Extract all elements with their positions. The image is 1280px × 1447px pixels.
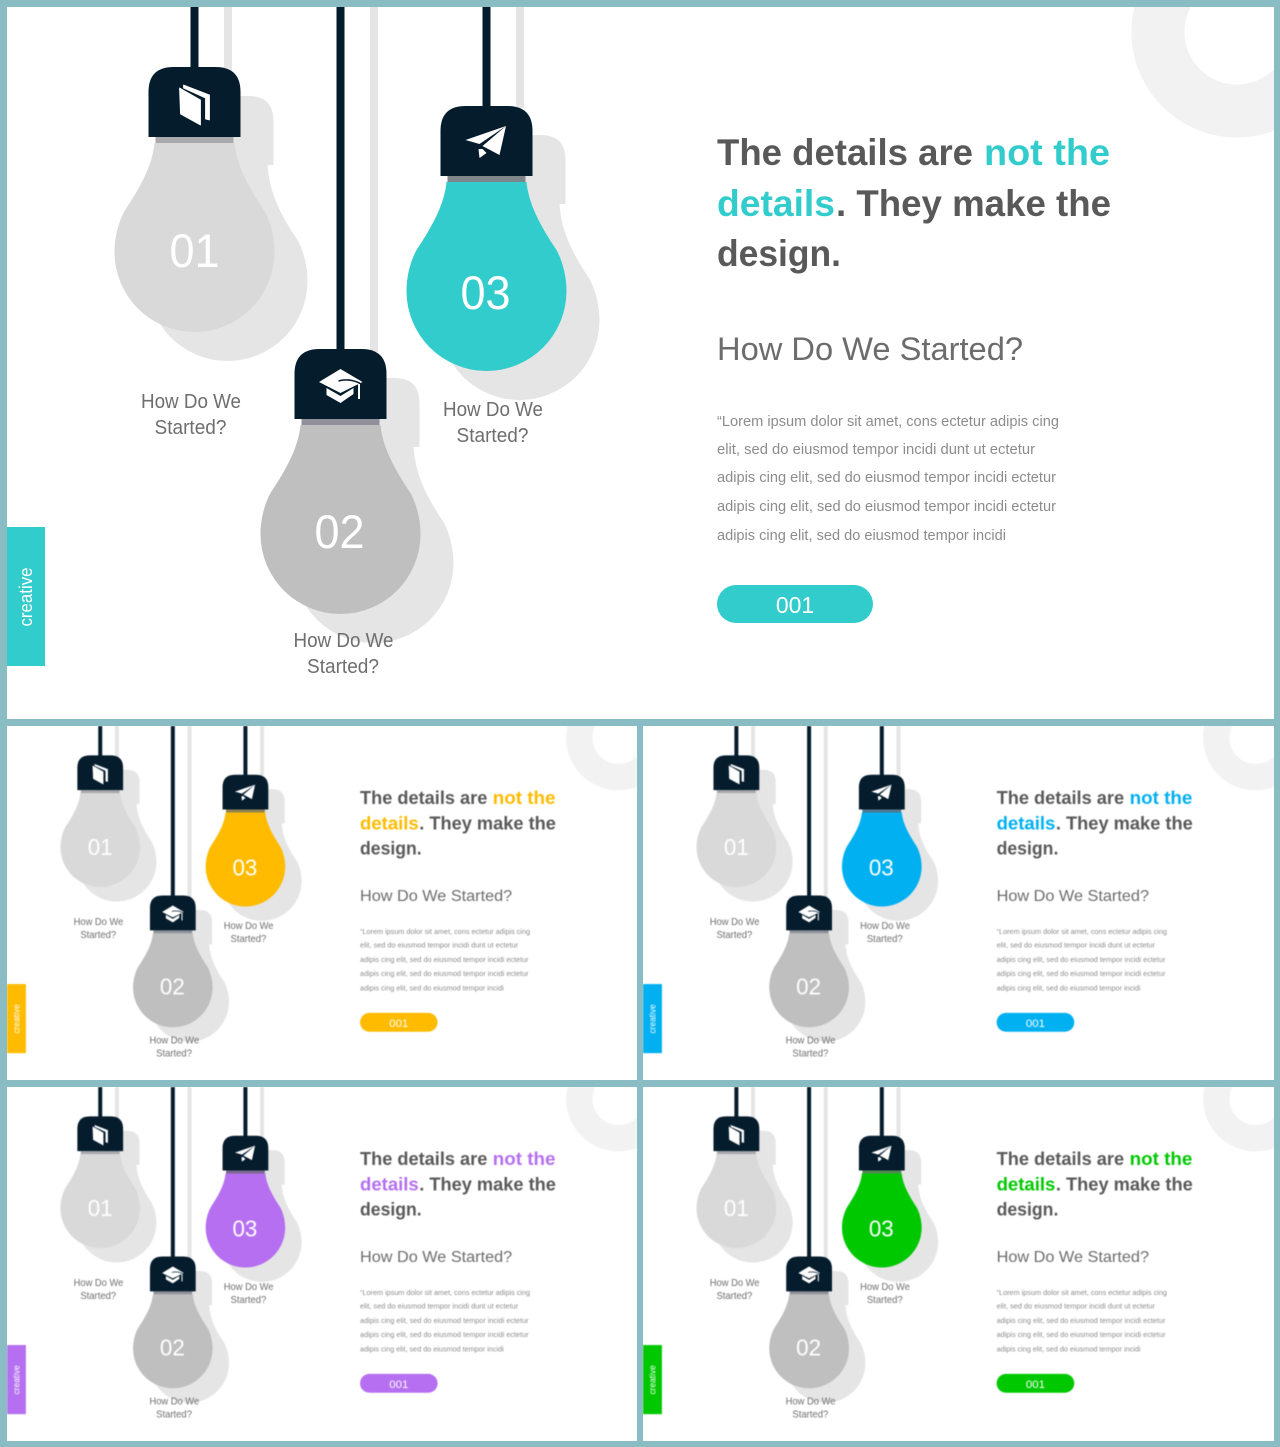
bulb 01: 01 — [724, 1195, 749, 1221]
bulb 03 label: Started? — [867, 934, 903, 945]
icon: paper plane — [235, 785, 255, 801]
side tab: creative — [647, 1365, 657, 1395]
bulb 02 label — [294, 630, 394, 678]
subheading: How Do We Started? — [360, 1249, 512, 1266]
bulb 03 label — [443, 399, 543, 447]
body text: “Lorem ipsum dolor sit amet, cons ectetur adipis cing — [997, 927, 1167, 936]
pill badge: 001 — [776, 592, 814, 618]
bulb 01 label: Started? — [80, 1291, 117, 1302]
heading: not the — [493, 1148, 555, 1169]
side tab — [7, 1345, 26, 1414]
body text: adipis cing elit, sed do eiusmod tempor incidi ectetur — [997, 1316, 1166, 1325]
subheading: How Do We Started? — [997, 1249, 1149, 1266]
heading — [997, 787, 1193, 858]
pill badge: 001 — [1026, 1018, 1045, 1030]
bulb 03: 03 — [232, 1216, 257, 1242]
bulb 02 label: How Do We — [786, 1036, 836, 1047]
bulb 03 label: How Do We — [443, 399, 543, 421]
side tab: creative — [11, 1365, 21, 1395]
side tab: creative — [16, 568, 36, 626]
body text — [997, 927, 1167, 993]
subheading: How Do We Started? — [717, 331, 1023, 367]
bulb 03 — [842, 1087, 922, 1267]
bulb 03 — [206, 1087, 285, 1267]
bulb 02 label — [786, 1036, 836, 1060]
pill badge — [717, 585, 873, 623]
bulb 01 label: How Do We — [74, 1278, 124, 1289]
heading — [717, 132, 1111, 274]
decorative ring — [579, 699, 658, 777]
panel: yellow slide — [7, 726, 637, 1080]
bulb 01 label: Started? — [716, 930, 753, 941]
decorative ring — [1216, 699, 1280, 777]
decorative ring — [1216, 1060, 1280, 1138]
heading: The details are — [360, 1148, 487, 1169]
heading: . They make the — [1056, 812, 1193, 833]
icon: paper plane — [466, 126, 506, 158]
panel: green slide — [643, 1087, 1274, 1441]
icon: book — [729, 1125, 744, 1145]
decorative ring — [579, 1060, 658, 1138]
icon: book — [729, 764, 744, 784]
icon: book — [93, 764, 108, 784]
bulb 02 label: How Do We — [786, 1397, 836, 1408]
icon: book — [180, 85, 210, 125]
heading: . They make the — [419, 812, 556, 833]
bulb 02 — [133, 726, 213, 1027]
bulb 02 label: How Do We — [149, 1036, 200, 1047]
side tab: creative — [11, 1004, 21, 1034]
side tab — [643, 1345, 662, 1414]
heading: details — [717, 183, 835, 224]
pill badge — [360, 1374, 438, 1393]
bulb 03 — [406, 7, 566, 371]
bulb 01 label: How Do We — [710, 1278, 760, 1289]
side tab — [7, 984, 26, 1053]
heading: design. — [997, 837, 1058, 858]
bulb 01 label — [74, 1278, 124, 1302]
heading: design. — [717, 233, 841, 274]
heading: details — [997, 812, 1055, 833]
bulb 01 — [114, 7, 274, 332]
bulb 03 — [842, 726, 922, 906]
body text: elit, sed do eiusmod tempor incidi dunt ut ectetur — [997, 941, 1156, 950]
bulb 02 label: Started? — [156, 1049, 192, 1060]
heading: The details are — [360, 787, 487, 808]
heading — [997, 1148, 1193, 1219]
heading: not the — [1130, 1148, 1192, 1169]
side tab — [7, 527, 45, 666]
pill badge — [997, 1374, 1074, 1393]
heading: The details are — [997, 787, 1124, 808]
bulb 03 label: Started? — [231, 934, 267, 945]
bulb 02: 02 — [314, 505, 364, 558]
bulb 03: 03 — [232, 855, 257, 881]
heading: The details are — [997, 1148, 1124, 1169]
bulb 01 label: How Do We — [710, 917, 760, 928]
bulb 02 label — [786, 1397, 836, 1421]
heading: design. — [360, 1198, 422, 1219]
bulb shadows — [713, 1087, 938, 1403]
body text: adipis cing elit, sed do eiusmod tempor incidi ectetur — [717, 499, 1056, 515]
body text: adipis cing elit, sed do eiusmod tempor incidi — [360, 984, 504, 993]
body text: adipis cing elit, sed do eiusmod tempor incidi ectetur — [717, 470, 1056, 486]
heading: details — [360, 1173, 419, 1194]
body text: adipis cing elit, sed do eiusmod tempor incidi ectetur — [997, 969, 1166, 978]
bulb 01 label — [74, 917, 124, 941]
pill badge: 001 — [389, 1018, 408, 1030]
icon: graduation cap — [162, 905, 184, 922]
body text: elit, sed do eiusmod tempor incidi dunt ut ectetur — [717, 442, 1035, 458]
bulb 01 — [697, 1087, 776, 1248]
bulb 02 — [769, 1087, 849, 1388]
bulb 01 label: Started? — [80, 930, 117, 941]
icon: graduation cap — [798, 905, 820, 922]
heading: . They make the — [1056, 1173, 1193, 1194]
side tab — [643, 984, 662, 1053]
body text: adipis cing elit, sed do eiusmod tempor incidi ectetur — [997, 955, 1166, 964]
bulb 03: 03 — [869, 1216, 894, 1242]
panel: purple slide — [7, 1087, 637, 1441]
body text — [360, 927, 530, 993]
panel: blue slide — [643, 726, 1274, 1080]
bulb shadows — [77, 726, 302, 1042]
bulb 02 label: Started? — [156, 1410, 192, 1421]
bulb 02 — [133, 1087, 213, 1388]
bulb shadows — [77, 1087, 302, 1403]
bulb 02: 02 — [160, 973, 185, 999]
body text: “Lorem ipsum dolor sit amet, cons ectetur adipis cing — [360, 927, 530, 936]
bulb 01 — [60, 1087, 140, 1248]
bulb 02 label: How Do We — [149, 1397, 200, 1408]
bulb 02: 02 — [796, 974, 821, 999]
bulb 02 — [769, 726, 849, 1027]
bulb 01 label — [141, 391, 241, 439]
heading: design. — [997, 1198, 1058, 1219]
bulb 01: 01 — [170, 224, 220, 277]
body text — [997, 1288, 1167, 1354]
bulb 03 label — [224, 921, 274, 945]
bulb 01 label: How Do We — [74, 917, 124, 928]
bulb 02: 02 — [160, 1334, 185, 1360]
subheading: How Do We Started? — [997, 888, 1149, 905]
bulb 01 label — [710, 1278, 760, 1302]
bulb 03 label: Started? — [456, 425, 528, 447]
heading: . They make the — [836, 183, 1111, 224]
icon: graduation cap — [319, 369, 362, 403]
heading — [360, 787, 556, 858]
body text: adipis cing elit, sed do eiusmod tempor incidi — [360, 1345, 504, 1354]
bulb 03 — [206, 726, 285, 906]
bulb 01 — [697, 726, 776, 887]
bulb 01 label: How Do We — [141, 391, 241, 413]
body text: “Lorem ipsum dolor sit amet, cons ectetur adipis cing — [360, 1288, 530, 1297]
decorative ring — [1158, 0, 1280, 111]
heading: details — [997, 1173, 1055, 1194]
bulb 03 label: How Do We — [224, 921, 274, 932]
bulb 03 label — [860, 1282, 910, 1306]
body text: adipis cing elit, sed do eiusmod tempor incidi ectetur — [360, 955, 529, 964]
bulb 03: 03 — [460, 266, 510, 319]
bulb 03 label: How Do We — [224, 1282, 274, 1293]
bulb 02 label: How Do We — [294, 630, 394, 652]
pill badge — [360, 1013, 438, 1032]
bulb 01: 01 — [724, 834, 749, 860]
bulb 01: 01 — [88, 834, 113, 860]
body text — [360, 1288, 530, 1354]
heading: not the — [493, 787, 555, 808]
body text: adipis cing elit, sed do eiusmod tempor incidi — [997, 1345, 1141, 1354]
icon: paper plane — [871, 1146, 892, 1162]
bulb 01 label: Started? — [154, 417, 226, 439]
body text: elit, sed do eiusmod tempor incidi dunt ut ectetur — [997, 1302, 1156, 1311]
bulb shadows — [713, 726, 938, 1042]
bulb 01 — [60, 726, 140, 887]
body text: adipis cing elit, sed do eiusmod tempor incidi ectetur — [360, 1330, 529, 1339]
icon: graduation cap — [798, 1266, 820, 1283]
bulb 03 label: Started? — [867, 1295, 903, 1306]
bulb 02: 02 — [796, 1335, 821, 1360]
body text: adipis cing elit, sed do eiusmod tempor incidi — [997, 984, 1141, 993]
body text: “Lorem ipsum dolor sit amet, cons ectetur adipis cing — [717, 414, 1059, 430]
bulb 01 label — [710, 917, 760, 941]
heading: not the — [1130, 787, 1192, 808]
body text — [717, 414, 1059, 544]
bulb 03: 03 — [869, 855, 894, 881]
bulb 02 label — [149, 1397, 200, 1421]
heading: . They make the — [419, 1173, 556, 1194]
side tab: creative — [647, 1004, 657, 1034]
bulb 03 label — [860, 921, 910, 945]
panel: main teal slide — [7, 7, 1274, 719]
icon: book — [93, 1125, 108, 1145]
bulb 03 label: Started? — [231, 1295, 267, 1306]
icon: graduation cap — [162, 1266, 184, 1283]
body text: “Lorem ipsum dolor sit amet, cons ectetur adipis cing — [997, 1288, 1167, 1297]
heading: design. — [360, 837, 422, 858]
bulb 01 label: Started? — [716, 1291, 753, 1302]
heading: not the — [984, 132, 1110, 173]
pill badge: 001 — [1026, 1379, 1045, 1391]
pill badge — [997, 1013, 1074, 1032]
bulb 02 label: Started? — [307, 656, 379, 678]
bulb 01: 01 — [88, 1195, 113, 1221]
subheading: How Do We Started? — [360, 888, 512, 905]
icon: paper plane — [871, 785, 892, 801]
body text: elit, sed do eiusmod tempor incidi dunt ut ectetur — [360, 941, 519, 950]
body text: adipis cing elit, sed do eiusmod tempor incidi ectetur — [997, 1330, 1166, 1339]
bulb 03 label: How Do We — [860, 1282, 910, 1293]
bulb 02 label — [149, 1036, 200, 1060]
body text: elit, sed do eiusmod tempor incidi dunt ut ectetur — [360, 1302, 519, 1311]
bulb 03 label: How Do We — [860, 921, 910, 932]
pill badge: 001 — [389, 1379, 408, 1391]
body text: adipis cing elit, sed do eiusmod tempor incidi ectetur — [360, 1316, 529, 1325]
heading — [360, 1148, 556, 1219]
bulb 02 — [260, 7, 420, 614]
heading: details — [360, 812, 419, 833]
bulb shadows — [148, 7, 600, 643]
bulb 02 label: Started? — [792, 1049, 829, 1060]
body text: adipis cing elit, sed do eiusmod tempor incidi ectetur — [360, 969, 529, 978]
body text: adipis cing elit, sed do eiusmod tempor incidi — [717, 528, 1006, 544]
bulb 02 label: Started? — [792, 1410, 829, 1421]
bulb 03 label — [224, 1282, 274, 1306]
icon: paper plane — [235, 1146, 255, 1162]
heading: The details are — [717, 132, 973, 173]
